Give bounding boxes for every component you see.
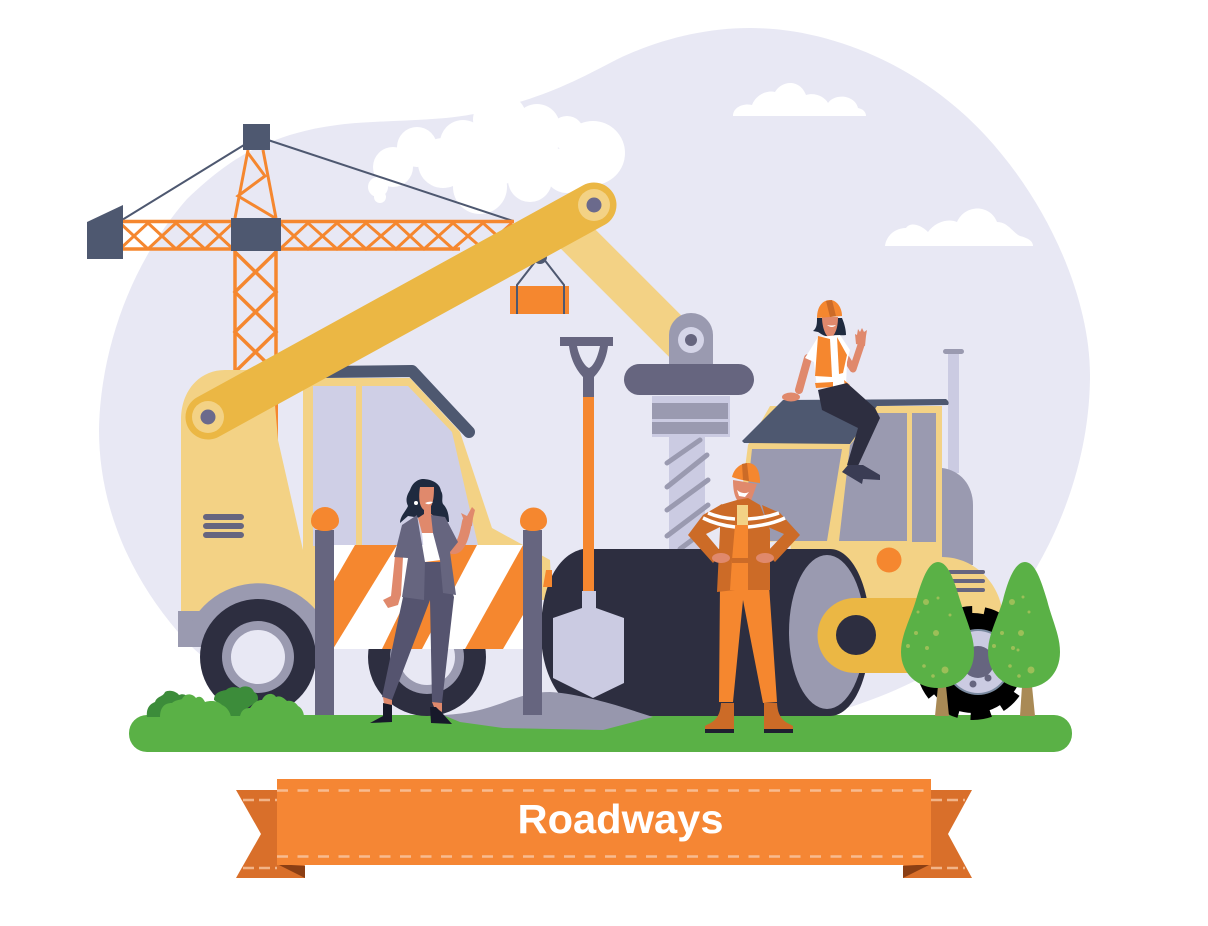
background blob [99, 28, 1090, 716]
shovel [553, 337, 624, 698]
truck bumper [178, 611, 218, 647]
bushes [147, 686, 304, 717]
jacket [394, 515, 458, 600]
crane mast lattice [235, 150, 276, 395]
trousers [719, 585, 777, 703]
cloud: top right small [733, 83, 866, 116]
jacket body [717, 498, 770, 592]
drill shaft [669, 436, 705, 556]
face [822, 317, 838, 338]
truck wheel arch [183, 583, 333, 647]
shovel grip [560, 337, 613, 397]
earring [414, 501, 418, 505]
trunk [1020, 686, 1035, 716]
boots [705, 703, 793, 733]
ribbon banner [236, 779, 972, 878]
trousers [382, 562, 454, 703]
reflective stripes [703, 513, 785, 527]
raised hand [461, 507, 475, 526]
overalls belt [732, 558, 748, 563]
raised arm [452, 522, 467, 549]
truck vents [206, 517, 241, 535]
crane counterweight [87, 205, 123, 259]
drill collar [652, 396, 730, 437]
crane top block [243, 124, 270, 150]
drill head [669, 313, 713, 370]
ground [129, 715, 1072, 752]
canopy [988, 562, 1060, 688]
stitched lines [277, 790, 931, 856]
smile [737, 490, 749, 497]
rear barrier wheel [368, 598, 486, 716]
roller roof [742, 399, 949, 444]
light bush left [160, 694, 231, 717]
foreman [688, 463, 800, 733]
seated worker [782, 300, 880, 484]
drum face [789, 555, 865, 709]
dots [906, 596, 952, 678]
dark bush middle [214, 686, 258, 716]
hands [712, 553, 774, 563]
ribbon left tail [236, 790, 305, 878]
rear tire [921, 611, 1025, 715]
ankles [383, 697, 442, 712]
cloud: right [885, 208, 1033, 246]
dark bush left [147, 691, 188, 717]
ribbon main panel [277, 779, 931, 865]
indicator light [876, 548, 902, 572]
canopy [901, 562, 974, 688]
face [733, 480, 757, 506]
barrier panel [333, 545, 523, 649]
hard hat [732, 463, 760, 483]
tree: right [988, 562, 1060, 716]
hair [813, 318, 846, 336]
hard hat [817, 300, 842, 318]
truck window left [313, 386, 356, 546]
vest [815, 336, 850, 388]
boom arm [192, 189, 610, 433]
dots [992, 596, 1034, 678]
hood vents [950, 572, 983, 590]
shirt [805, 335, 850, 388]
lowered arm and hand [383, 556, 403, 608]
left truck [178, 370, 552, 715]
barrier knob right [520, 508, 547, 531]
truck window right [362, 386, 478, 545]
crane cables [122, 140, 513, 221]
hanging load [510, 250, 569, 314]
drill spiral [667, 440, 708, 549]
tower crane [87, 124, 514, 445]
barrier post right [523, 530, 542, 715]
face and neck [418, 487, 437, 533]
crane center block [231, 218, 281, 251]
barrier [311, 507, 552, 716]
trunk [935, 686, 949, 716]
barrier stripes [333, 545, 552, 649]
shovel handle [583, 397, 594, 592]
crane jib lattice [120, 222, 514, 249]
barrier post left [315, 530, 334, 715]
truck body [181, 370, 320, 612]
drill assembly [624, 313, 754, 556]
gravel pile [443, 692, 653, 730]
excavator second arm [570, 231, 690, 351]
cloud: smoke [368, 93, 625, 214]
big drum [541, 549, 870, 716]
exhaust cap [943, 349, 964, 354]
waving hand [855, 328, 867, 346]
light bush right [240, 694, 304, 717]
roller windows [742, 413, 936, 542]
jacket arm right [762, 505, 800, 562]
road roller [541, 349, 1025, 716]
overalls bib [730, 525, 748, 590]
smile [827, 325, 836, 327]
shovel blade [553, 591, 624, 698]
shirt [422, 533, 441, 562]
engine housing [942, 468, 973, 565]
truck roof [322, 371, 469, 432]
support arm [799, 358, 808, 390]
crane mast lower tip [272, 400, 278, 445]
truck cab frame [303, 378, 552, 600]
shoes [842, 465, 880, 484]
tree: left [901, 562, 974, 716]
hair [400, 479, 449, 523]
barrier knob left [311, 507, 339, 531]
drill bar [624, 364, 754, 395]
support hand [782, 392, 800, 402]
ribbon right tail [903, 790, 972, 878]
trousers [818, 383, 880, 468]
waving arm [846, 345, 861, 369]
businesswoman [370, 479, 475, 724]
banner title: Roadways [518, 796, 724, 842]
inner shirt [737, 505, 748, 525]
roller body [735, 406, 1003, 660]
shoes [370, 703, 452, 724]
exhaust pipe [948, 353, 959, 473]
jacket arm left [688, 504, 722, 563]
truck front wheel [200, 599, 316, 715]
smile [425, 502, 433, 504]
roller yoke [818, 598, 925, 673]
yoke hole [836, 615, 876, 655]
